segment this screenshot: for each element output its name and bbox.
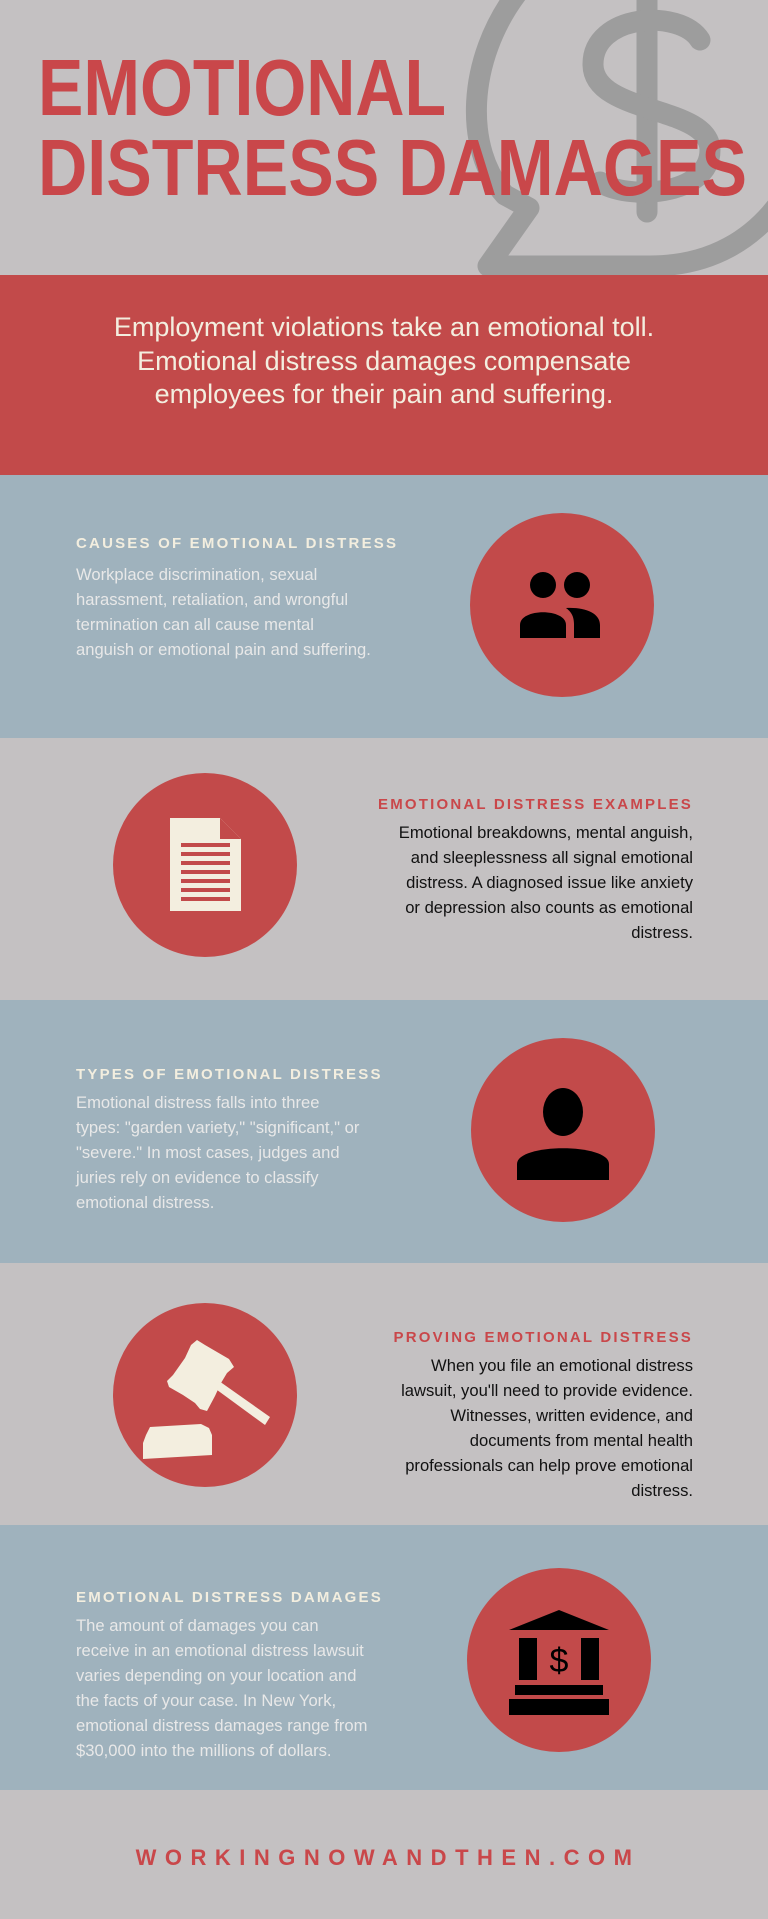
text: causes: termination can all cause mental (76, 615, 314, 634)
text: damages (76, 1616, 367, 1760)
text: proving: documents from mental health (470, 1431, 693, 1450)
text: causes: Workplace discrimination, sexual (76, 565, 317, 584)
text: examples: or depression also counts as emotional (405, 898, 693, 917)
intro band (0, 275, 768, 475)
text: proving (401, 1356, 693, 1500)
text: damages: emotional distress damages range from (76, 1716, 367, 1735)
text: damages: receive in an emotional distress lawsuit (76, 1641, 364, 1660)
intro text: Employment violations take an emotional toll. (114, 312, 654, 342)
heading: examples: EMOTIONAL DISTRESS EXAMPLES (378, 796, 693, 813)
intro text: employees for their pain and suffering. (155, 379, 613, 409)
intro text: Emotional distress damages compensate (137, 346, 631, 376)
icon: gavel (113, 1303, 297, 1487)
icon: bank: $ (550, 1642, 569, 1680)
icon: person (471, 1038, 655, 1222)
icon: bank (467, 1568, 651, 1752)
text: causes: anguish or emotional pain and suffering. (76, 640, 371, 659)
intro text (114, 312, 654, 409)
panel: examples (0, 738, 768, 1000)
text: types: juries rely on evidence to classify (76, 1168, 319, 1187)
text: damages: The amount of damages you can (76, 1616, 319, 1635)
icon: speech bubble with dollar sign (38, 0, 768, 275)
panel: proving (0, 1263, 768, 1525)
text: examples (399, 823, 693, 942)
heading: types: TYPES OF EMOTIONAL DISTRESS (76, 1066, 383, 1083)
title: EMOTIONAL (38, 43, 446, 132)
footer (0, 1790, 768, 1919)
text: causes (76, 565, 371, 659)
text: proving: When you file an emotional distress (431, 1356, 693, 1375)
title (38, 43, 747, 212)
text: types: emotional distress. (76, 1193, 214, 1212)
panel: causes (0, 475, 768, 738)
panel: types (0, 1000, 768, 1263)
icon: people (470, 513, 654, 697)
heading: damages: EMOTIONAL DISTRESS DAMAGES (76, 1589, 383, 1606)
footer url: WORKINGNOWANDTHEN.COM (136, 1845, 640, 1870)
text: types (76, 1093, 360, 1212)
text: examples: distress. A diagnosed issue like anxiety (406, 873, 693, 892)
text: examples: distress. (631, 923, 693, 942)
text: damages: $30,000 into the millions of dollars. (76, 1741, 332, 1760)
text: proving: Witnesses, written evidence, and (450, 1406, 693, 1425)
text: damages: the facts of your case. In New York, (76, 1691, 336, 1710)
text: examples: Emotional breakdowns, mental anguish, (399, 823, 693, 842)
heading: proving: PROVING EMOTIONAL DISTRESS (394, 1329, 693, 1346)
text: types: "severe." In most cases, judges and (76, 1143, 340, 1162)
heading: causes: CAUSES OF EMOTIONAL DISTRESS (76, 535, 398, 552)
text: causes: harassment, retaliation, and wrongful (76, 590, 348, 609)
header (0, 0, 768, 275)
panel: damages (0, 1525, 768, 1790)
text: proving: professionals can help prove emotional (405, 1456, 693, 1475)
text: damages: varies depending on your location and (76, 1666, 356, 1685)
text: types: types: "garden variety," "significant," or (76, 1118, 359, 1137)
text: proving: distress. (631, 1481, 693, 1500)
text: types: Emotional distress falls into three (76, 1093, 320, 1112)
text: proving: lawsuit, you'll need to provide evidence. (401, 1381, 693, 1400)
icon: document (113, 773, 297, 957)
text: examples: and sleeplessness all signal emotional (411, 848, 693, 867)
